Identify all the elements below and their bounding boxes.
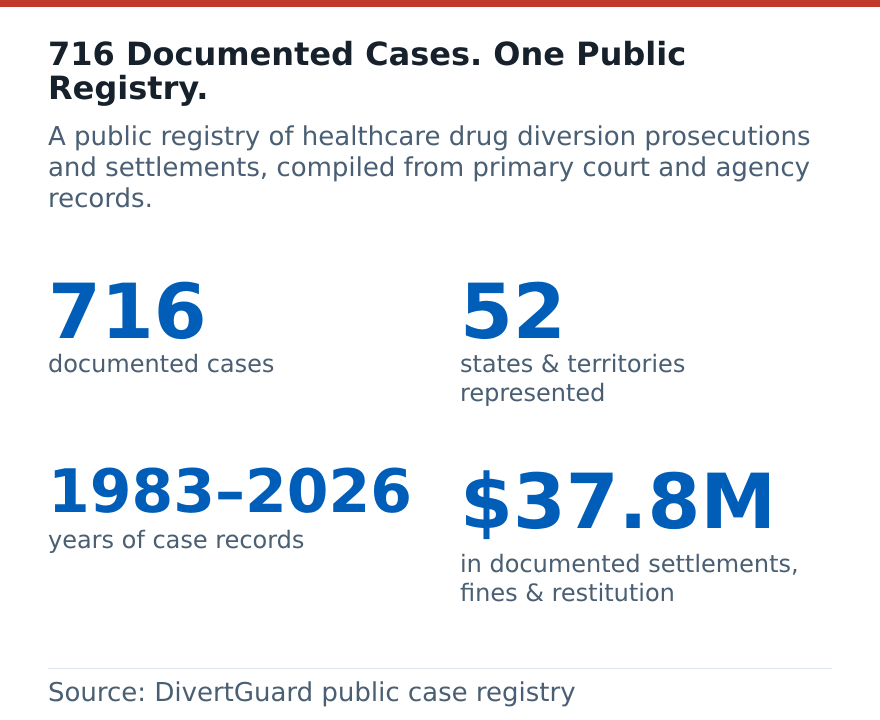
stat label: in documented settlements, xyxy=(460,550,799,578)
stat label: documented cases xyxy=(48,350,274,378)
stat label: years of case records xyxy=(48,526,304,554)
subtitle: and settlements, compiled from primary court and agency xyxy=(48,153,810,183)
subtitle: records. xyxy=(48,184,153,214)
stat: settlements xyxy=(460,457,799,607)
title xyxy=(48,35,686,107)
stat label: fines & restitution xyxy=(460,579,675,607)
stat: states and territories xyxy=(460,267,685,407)
subtitle xyxy=(48,122,811,214)
title: 716 Documented Cases. One Public xyxy=(48,35,686,73)
stat: years of records xyxy=(48,457,412,554)
stat label xyxy=(460,550,799,607)
subtitle: A public registry of healthcare drug diversion prosecutions xyxy=(48,122,811,152)
stat label xyxy=(460,350,685,407)
stat label: represented xyxy=(460,379,605,407)
stat: documented cases xyxy=(48,267,274,378)
stat label: states & territories xyxy=(460,350,685,378)
top accent bar xyxy=(0,0,880,7)
source note: Source: DivertGuard public case registry xyxy=(48,678,576,708)
stat number: $37.8M xyxy=(460,457,776,546)
stat number: 1983–2026 xyxy=(48,457,412,527)
title: Registry. xyxy=(48,69,208,107)
stat number: 52 xyxy=(460,267,566,356)
stat number: 716 xyxy=(48,267,207,356)
